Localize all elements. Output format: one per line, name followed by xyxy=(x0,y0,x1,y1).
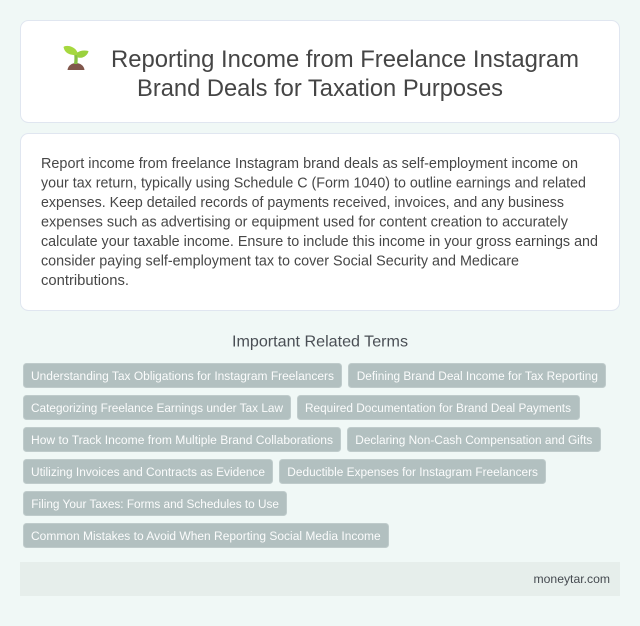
icon: seedling xyxy=(64,46,88,70)
chip xyxy=(298,396,580,420)
chip: Required Documentation for Brand Deal Payments xyxy=(305,401,571,415)
text block: description paragraph xyxy=(41,156,598,289)
panel: title header xyxy=(20,20,620,122)
chip xyxy=(24,396,290,420)
chip xyxy=(348,428,600,452)
chip xyxy=(24,492,286,516)
chip: Understanding Tax Obligations for Instagram Freelancers xyxy=(31,369,334,383)
title: Reporting Income from Freelance Instagram xyxy=(111,46,579,73)
text block: description paragraph: calculate your taxable income. Ensure to include this income in your gross earnings and xyxy=(41,234,598,250)
text block: description paragraph: your tax return, typically using Schedule C (Form 1040) to outline earnings and related xyxy=(41,176,586,192)
title xyxy=(111,46,579,102)
text block: description paragraph: contributions. xyxy=(41,273,129,289)
title: Brand Deals for Taxation Purposes xyxy=(137,75,503,102)
chip: Categorizing Freelance Earnings under Tax Law xyxy=(31,401,283,415)
footer xyxy=(20,562,620,596)
chips: related terms xyxy=(24,364,606,548)
footer source text: moneytar.com xyxy=(534,572,610,586)
text block: description paragraph: expenses such as advertising or equipment used for content creation to accurately xyxy=(41,214,569,230)
panel: description xyxy=(20,134,620,310)
heading: important related terms: Important Related Terms xyxy=(232,334,408,350)
chip: Common Mistakes to Avoid When Reporting Social Media Income xyxy=(31,529,381,543)
chip xyxy=(24,460,272,484)
chip: Deductible Expenses for Instagram Freelancers xyxy=(287,465,538,479)
chip xyxy=(348,364,606,388)
chip xyxy=(24,364,342,388)
chip: Defining Brand Deal Income for Tax Reporting xyxy=(357,369,598,383)
chip: How to Track Income from Multiple Brand Collaborations xyxy=(31,433,333,447)
chip xyxy=(280,460,546,484)
chip: Utilizing Invoices and Contracts as Evidence xyxy=(31,465,265,479)
chip xyxy=(24,428,340,452)
text block: description paragraph: Report income from freelance Instagram brand deals as self-employment income on xyxy=(41,156,578,172)
text block: description paragraph: expenses. Keep detailed records of payments received, invoices, and any business xyxy=(41,195,564,211)
chip: Filing Your Taxes: Forms and Schedules to Use xyxy=(31,497,279,511)
chip xyxy=(24,524,388,548)
chip: Declaring Non-Cash Compensation and Gifts xyxy=(355,433,592,447)
text block: description paragraph: consider paying self-employment tax to cover Social Security and Medicare xyxy=(41,254,519,270)
